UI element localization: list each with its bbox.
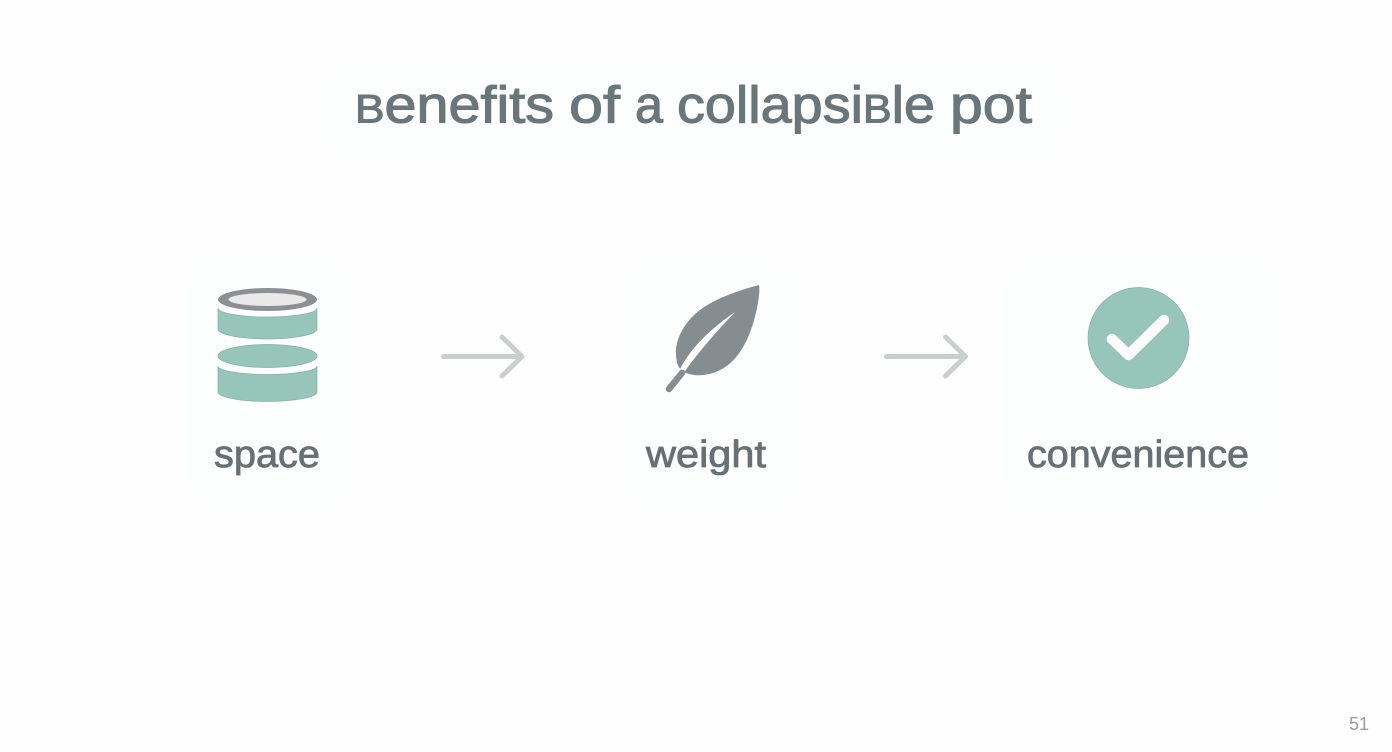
label: convenience: convenience <box>1027 434 1249 476</box>
title <box>355 76 1033 134</box>
title: collapsi Ble <box>677 76 935 134</box>
benefit: convenience <box>1027 288 1249 476</box>
title: of <box>569 76 621 134</box>
title: Benefits <box>355 76 554 134</box>
icon: stacked collapsible pot <box>218 288 317 402</box>
page number: 51 <box>1349 714 1369 734</box>
label: weight: weight <box>645 434 766 476</box>
icon: check mark circle <box>1088 288 1189 388</box>
title: a <box>635 76 663 134</box>
arrow: space to weight <box>444 337 522 376</box>
benefit: weight <box>645 285 766 476</box>
label: space: space <box>214 434 320 476</box>
benefit: space <box>214 288 320 476</box>
arrow: weight to convenience <box>886 337 966 376</box>
icon: leaf <box>669 285 759 389</box>
title: pot <box>950 76 1033 134</box>
